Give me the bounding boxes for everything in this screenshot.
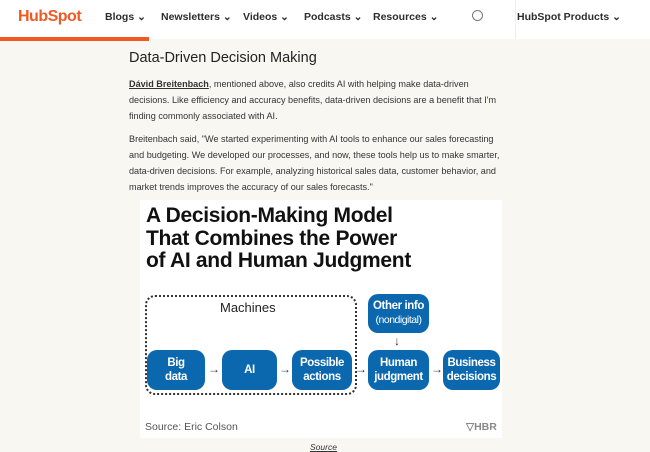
box: AI <box>222 350 277 390</box>
paragraph 1: Dávid Breitenbach, mentioned above, also credits AI with helping make data-driven decisions. Like efficiency and accuracy benefits, data-driven decisions are a benefit that I'm finding commonly associated with AI. <box>129 79 496 121</box>
box: human judgment <box>368 350 429 390</box>
HBR logo: ▽HBR <box>466 421 497 433</box>
header bar: Podcasts ⌄ <box>304 11 362 23</box>
box: possible actions: actions <box>303 371 341 383</box>
box: business decisions <box>443 350 500 390</box>
arrow down: ↓ <box>394 334 400 348</box>
box: big data: data <box>165 371 187 383</box>
arrow 1: → <box>208 362 220 376</box>
infographic title: A Decision-Making Model <box>146 204 393 227</box>
header bar <box>0 0 515 39</box>
box: human judgment: judgment <box>374 371 423 383</box>
box: business decisions: Business <box>448 357 495 369</box>
infographic title <box>146 204 412 272</box>
infographic image <box>140 200 502 438</box>
heading: Data-Driven Decision Making <box>129 50 317 66</box>
orange progress bar <box>0 37 149 41</box>
infographic title: That Combines the Power <box>146 226 397 250</box>
arrow 2: → <box>279 362 291 376</box>
paragraph 2: Breitenbach said, "We started experimenting with AI tools to enhance our sales forecasting and budgeting. We developed our processes, and now, these tools help us to make smarter, data-driven decisions. For example, analyzing historical sales data, customer behavior, and market trends improves the accuracy of our sales forecasts." <box>129 134 499 192</box>
box: big data: Big <box>167 357 185 369</box>
arrow 3: → <box>355 362 367 376</box>
nav items: Blogs ⌄ <box>105 11 146 23</box>
arrow 4: → <box>431 362 443 376</box>
header bar: Videos ⌄ <box>243 11 289 23</box>
header bar: Resources ⌄ <box>373 11 438 23</box>
source link: Source <box>310 442 337 452</box>
box: human judgment: Human <box>380 357 417 369</box>
logo: HubSpot <box>18 8 81 25</box>
machines dotted group <box>145 295 357 395</box>
products menu: HubSpot Products ⌄ <box>517 11 621 23</box>
box: other info <box>368 294 429 333</box>
infographic title: of AI and Human Judgment <box>146 249 411 272</box>
box: big data <box>147 350 205 390</box>
source credit: Source: Eric Colson <box>145 421 238 433</box>
box: AI: AI <box>244 364 255 376</box>
box: possible actions <box>292 350 352 390</box>
machines label: Machines <box>220 300 276 315</box>
box: business decisions: decisions <box>447 371 496 383</box>
box: other info: Other info <box>373 300 424 312</box>
header bar: Newsletters ⌄ <box>161 11 232 23</box>
icon: search <box>472 10 483 21</box>
box: other info: (nondigital) <box>376 314 421 326</box>
box: possible actions: Possible <box>300 357 344 369</box>
